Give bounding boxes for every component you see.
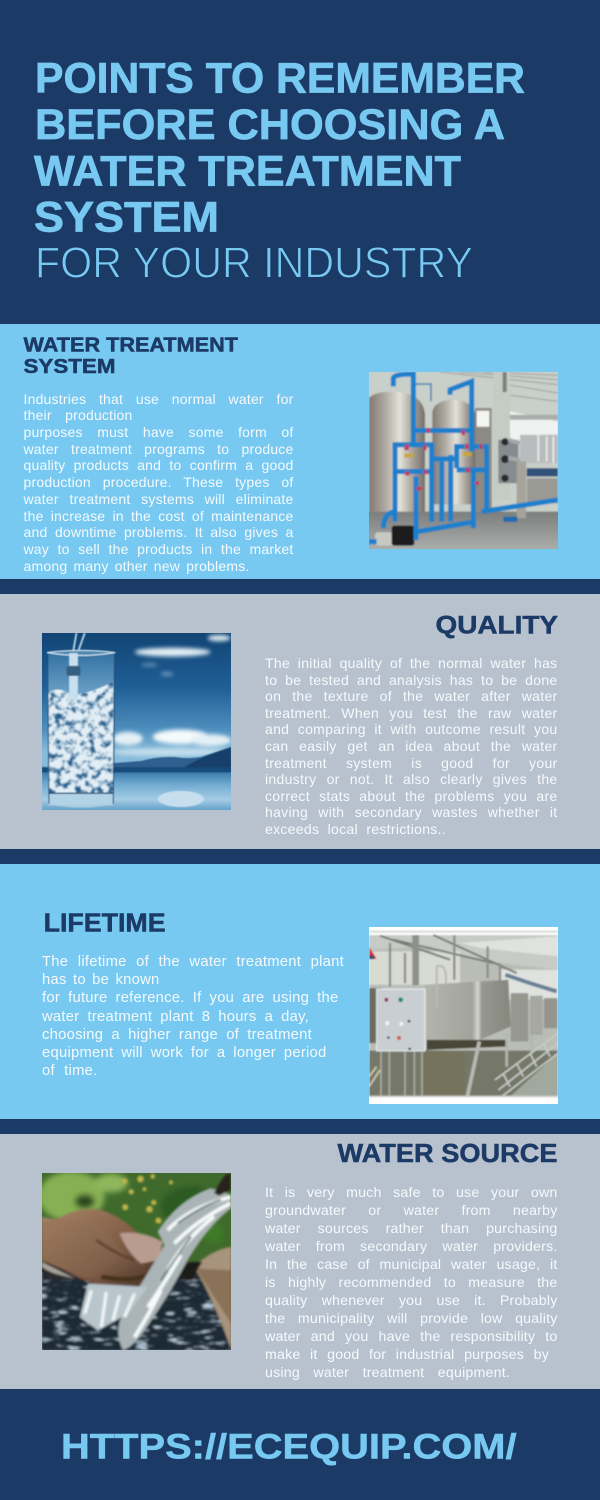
text block: water source: is highly recommended to measure the — [265, 1275, 558, 1291]
text block: water treatment system: Industries that use normal water for — [24, 391, 294, 407]
heading: lifetime: LIFETIME — [44, 908, 166, 938]
panel: water source — [0, 1134, 600, 1389]
text block: quality: correct stats about the problems you are — [265, 788, 558, 804]
text block: quality: The initial quality of the normal water has — [265, 655, 558, 671]
title: POINTS TO REMEMBER — [35, 56, 525, 103]
text block: water source: the municipality will provide low quality — [265, 1311, 558, 1327]
text block: lifetime: water treatment plant 8 hours a day, — [42, 1009, 309, 1025]
text block: lifetime — [42, 954, 344, 1079]
text block: water treatment system: and downtime problems. It also gives a — [24, 524, 294, 540]
panel: water treatment system — [0, 324, 600, 579]
photo: water treatment plant with blue pipes — [369, 372, 558, 549]
text block: water treatment system: way to sell the products in the market — [24, 541, 294, 557]
text block: quality: treatment. When you test the raw water — [265, 705, 558, 721]
title: BEFORE CHOOSING A — [35, 102, 505, 149]
text block: lifetime: choosing a higher range of treatment — [42, 1027, 312, 1043]
text block: water source — [265, 1185, 558, 1381]
title — [34, 56, 525, 288]
text block: quality: on the texture of the water after water — [265, 688, 558, 704]
text block: quality: to be tested and analysis has to be done — [265, 672, 558, 688]
text block: lifetime: has to be known — [42, 972, 160, 988]
text block: water source: make it good for industrial purposes by — [265, 1347, 549, 1363]
text block: water treatment system: the increase in the cost of maintenance — [24, 508, 294, 524]
text block: quality: treatment system is good for your — [265, 755, 558, 771]
text block: quality: can easily get an idea about the water — [265, 738, 558, 754]
heading: water source: WATER SOURCE — [338, 1138, 558, 1168]
photo: glass of water by a lake — [42, 633, 231, 810]
text block: lifetime: The lifetime of the water treatment plant — [42, 954, 344, 970]
text block: water source: quality whenever you use it. Probably — [265, 1293, 558, 1309]
text block: quality: and comparing it with outcome result you — [265, 721, 558, 737]
photo: stainless steel tanks in a factory — [369, 927, 558, 1104]
text block: water source: It is very much safe to use your own — [265, 1185, 558, 1201]
text block: lifetime: equipment will work for a longer period — [42, 1045, 326, 1061]
text block: water treatment system: quality products and to confirm a good — [24, 457, 294, 473]
text block: water source: water from secondary water providers. — [265, 1239, 558, 1255]
text block: quality: having with secondary wastes whether it — [265, 804, 558, 820]
text block: quality: exceeds local restrictions.. — [265, 821, 446, 837]
text block: water source: using water treatment equipment. — [265, 1365, 510, 1381]
text block: quality — [265, 655, 558, 837]
text block: water treatment system — [24, 391, 294, 574]
panel: lifetime — [0, 864, 600, 1119]
footer url: HTTPS://ECEQUIP.COM/ — [61, 1428, 517, 1467]
text block: water source: water and you have the responsibility to — [265, 1329, 558, 1345]
text block: water treatment system: production procedure. These types of — [24, 474, 294, 490]
heading: water treatment system: WATER TREATMENT — [24, 335, 238, 357]
panel: quality — [0, 594, 600, 849]
title: FOR YOUR INDUSTRY — [35, 240, 473, 288]
photo: hands cupped under running water — [42, 1173, 231, 1350]
text block: quality: industry or not. It also clearly gives the — [265, 771, 558, 787]
title: SYSTEM — [34, 195, 219, 242]
title: WATER TREATMENT — [34, 149, 461, 196]
text block: water source: groundwater or water from nearby — [265, 1203, 558, 1219]
text block: water source: In the case of municipal water usage, it — [265, 1257, 558, 1273]
text block: water treatment system: among many other new problems. — [24, 558, 250, 574]
text block: water treatment system: their production — [24, 407, 132, 423]
heading: quality: QUALITY — [436, 611, 558, 639]
text block: water treatment system: purposes must have some form of — [24, 424, 294, 440]
text block: water treatment system: water treatment programs to produce — [24, 441, 294, 457]
text block: lifetime: for future reference. If you are using the — [42, 990, 338, 1006]
text block: water source: water sources rather than purchasing — [265, 1221, 558, 1237]
text block: water treatment system: water treatment systems will eliminate — [24, 491, 294, 507]
heading: water treatment system — [23, 335, 238, 378]
text block: lifetime: of time. — [42, 1063, 98, 1079]
heading: water treatment system: SYSTEM — [24, 356, 116, 378]
